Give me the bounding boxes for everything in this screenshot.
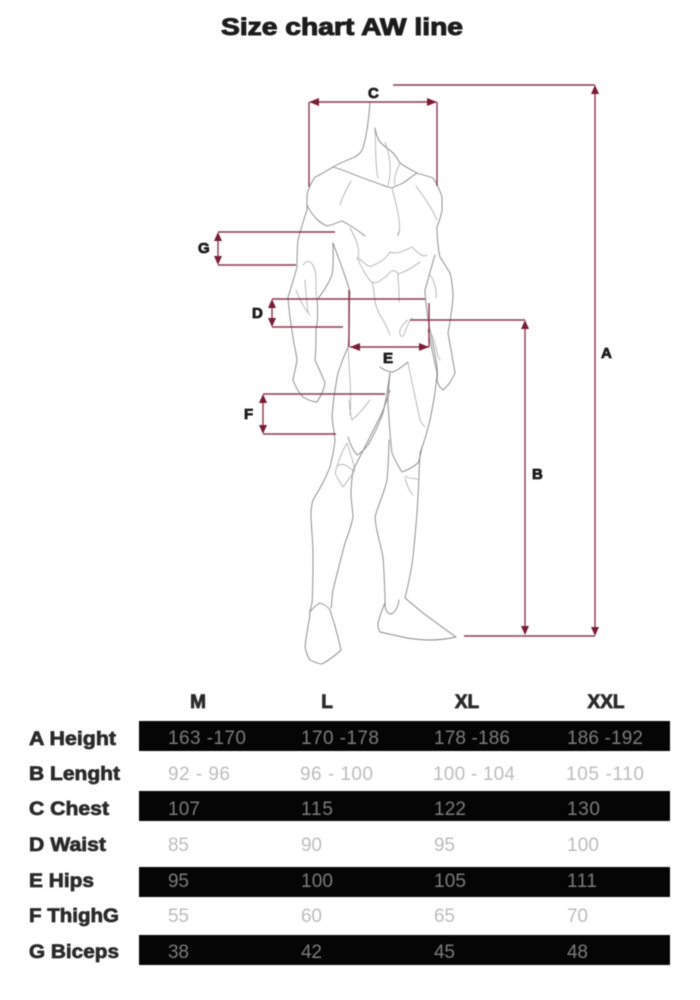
measurement letters [198, 85, 612, 483]
row: E Hips: 105 [434, 871, 466, 892]
row: E Hips: 95 [168, 871, 189, 892]
measurement letters: E [383, 350, 393, 367]
row: A Height: 163 -170 [168, 728, 246, 749]
row: G Biceps: 38 [168, 942, 189, 963]
row: B Lenght: B Lenght [29, 764, 121, 785]
row: C Chest: 122 [434, 799, 466, 820]
row: E Hips: E Hips [29, 871, 94, 892]
row: C Chest: 107 [168, 799, 200, 820]
row: D Waist: D Waist [29, 835, 107, 856]
measurement letters: A [601, 345, 612, 362]
row: E Hips: 111 [567, 871, 597, 892]
measurement B: length [410, 320, 529, 635]
measurement F: thigh [259, 394, 385, 434]
measurement C: chest [309, 98, 437, 187]
row: F ThighG: 70 [567, 906, 588, 927]
row: B Lenght: 100 - 104 [433, 764, 515, 785]
measurement E: hips [349, 290, 429, 351]
row: C Chest [29, 791, 670, 821]
measurement letters: C [368, 85, 379, 102]
row: C Chest: C Chest [29, 799, 110, 820]
row: C Chest: 130 [567, 799, 600, 820]
row: E Hips [29, 867, 670, 897]
row: A Height: 186 -192 [567, 728, 643, 749]
row: F ThighG [29, 906, 588, 927]
row: B Lenght: 96 - 100 [300, 764, 373, 785]
measurement letters: B [532, 466, 543, 483]
row: F ThighG: F ThighG [29, 906, 119, 927]
row: D Waist [29, 835, 599, 856]
row: F ThighG: 60 [301, 906, 322, 927]
row: D Waist: 85 [168, 835, 189, 856]
measurement letters: F [244, 406, 253, 423]
row: A Height: 170 -178 [301, 728, 379, 749]
table size headers [190, 692, 625, 713]
measurement A: height [393, 85, 599, 636]
row: D Waist: 90 [301, 835, 322, 856]
row: G Biceps: 42 [301, 942, 322, 963]
measurement G: biceps [214, 232, 335, 265]
row: B Lenght: 92 - 96 [168, 764, 230, 785]
title: Size chart AW line [221, 14, 463, 41]
figure: anatomical body outline [288, 102, 456, 664]
row: G Biceps [29, 935, 670, 965]
row: A Height: 178 -186 [434, 728, 510, 749]
row: G Biceps: 45 [434, 942, 455, 963]
measurement letters: D [252, 305, 263, 322]
row: C Chest: 115 [301, 799, 333, 820]
table size headers: XXL [588, 692, 625, 713]
row: F ThighG: 55 [168, 906, 189, 927]
row: B Lenght: 105 -110 [566, 764, 644, 785]
row: D Waist: 100 [567, 835, 599, 856]
measurement D: waist [268, 299, 425, 327]
row: D Waist: 95 [434, 835, 455, 856]
table size headers: M [190, 692, 206, 713]
row: F ThighG: 65 [434, 906, 455, 927]
row: A Height [29, 721, 670, 751]
row: G Biceps: G Biceps [29, 942, 119, 963]
measurement letters: G [198, 240, 210, 257]
row: G Biceps: 48 [567, 942, 588, 963]
row: E Hips: 100 [301, 871, 333, 892]
table size headers: XL [455, 692, 480, 713]
row: B Lenght [29, 764, 644, 785]
row: A Height: A Height [29, 729, 117, 750]
table size headers: L [321, 692, 333, 713]
